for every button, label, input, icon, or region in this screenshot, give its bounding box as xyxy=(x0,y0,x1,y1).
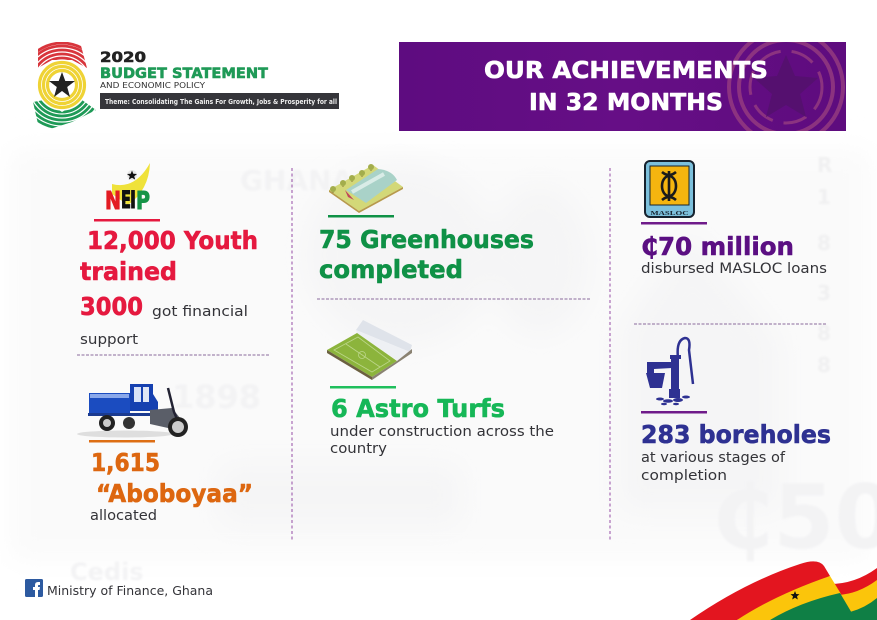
heading: 6 Astro Turfs: 6 Astro Turfs xyxy=(331,394,505,423)
icon: MASLOC logo: MASLOC xyxy=(650,210,689,217)
panel: astro turfs xyxy=(327,320,554,457)
background watermark: 3 xyxy=(817,281,831,305)
icon: facebook xyxy=(25,579,43,597)
icon: football pitch xyxy=(327,320,412,380)
icon: NEIP logo: N xyxy=(105,186,121,215)
text: got financial support: support xyxy=(80,332,139,348)
background watermark: Cedis xyxy=(70,558,144,586)
heading: 75 Greenhouses completed: completed xyxy=(319,255,463,284)
text: at various stages: completion xyxy=(641,468,727,484)
icon: NEIP logo xyxy=(105,163,150,215)
icon: greenhouse xyxy=(329,164,403,213)
text: under construction: under construction across the xyxy=(330,424,554,440)
text: at various stages xyxy=(641,450,786,484)
text: under construction xyxy=(330,424,554,457)
heading: 1,615 Aboboyaa: “Aboboyaa” xyxy=(96,479,253,508)
logo: budget statement wordmark: AND ECONOMIC POLICY xyxy=(100,81,205,90)
title banner: IN 32 MONTHS xyxy=(529,90,723,116)
heading: 12,000 Youth trained: trained xyxy=(80,257,177,286)
background watermark: 8 xyxy=(817,321,831,345)
heading: 1,615 Aboboyaa: 1,615 xyxy=(91,448,160,477)
heading: 75 Greenhouses completed xyxy=(319,225,534,284)
background watermark xyxy=(10,150,877,586)
background watermark: GHANA xyxy=(240,164,354,197)
background watermark: 8 xyxy=(817,353,831,377)
panel: MASLOC xyxy=(634,161,827,324)
icon: NEIP logo: P xyxy=(136,186,150,215)
text: allocated: allocated xyxy=(90,508,157,524)
background watermark: 1898 xyxy=(172,378,261,416)
background watermark: R xyxy=(817,153,832,177)
heading: 283 boreholes: 283 boreholes xyxy=(641,420,831,449)
heading: 12,000 Youth trained: 12,000 Youth xyxy=(87,226,258,255)
text: disbursed MASLOC loans: disbursed MASLOC loans xyxy=(641,261,827,277)
flag: Ghana ribbon xyxy=(690,561,877,620)
title banner: OUR ACHIEVEMENTS xyxy=(484,58,768,84)
panel: NEIP youth training xyxy=(77,163,269,355)
logo: budget statement wordmark xyxy=(100,50,339,109)
heading: 12,000 Youth trained: 3000 xyxy=(80,292,143,321)
logo: budget statement wordmark: Theme: Consolidating The Gains For Growth, Jobs & Prosperity for all xyxy=(105,97,337,106)
icon: MASLOC logo xyxy=(645,161,694,217)
column dividers xyxy=(292,168,610,540)
footer: Facebook credit xyxy=(25,579,213,598)
panel: Aboboyaa xyxy=(77,384,253,524)
panel: greenhouses xyxy=(317,164,591,299)
heading: 70 million: ₵70 million xyxy=(641,232,794,261)
logo: Ghana map emblem xyxy=(33,42,96,128)
heading: 1,615 Aboboyaa xyxy=(91,448,253,508)
title banner xyxy=(399,42,846,131)
logo: budget statement wordmark: 2020 xyxy=(100,50,146,66)
icon: NEIP logo: I xyxy=(130,186,136,214)
text: at various stages: at various stages of xyxy=(641,450,786,466)
heading: 12,000 Youth trained xyxy=(80,226,258,321)
text: under construction: country xyxy=(330,441,387,457)
panel: boreholes xyxy=(641,338,831,484)
icon: water pump xyxy=(646,338,693,405)
text: got financial support: got financial xyxy=(152,304,248,320)
icon: blue tricycle xyxy=(77,384,188,438)
icon: NEIP logo: E xyxy=(121,186,131,214)
footer: Facebook credit: Ministry of Finance, Ghana xyxy=(47,583,213,598)
background watermark: 8 xyxy=(817,231,831,255)
logo: budget statement wordmark: BUDGET STATEMENT xyxy=(100,66,268,82)
background watermark: 1 xyxy=(817,185,831,209)
text: got financial support xyxy=(80,304,248,348)
heading: 75 Greenhouses completed: 75 Greenhouses xyxy=(319,225,534,254)
